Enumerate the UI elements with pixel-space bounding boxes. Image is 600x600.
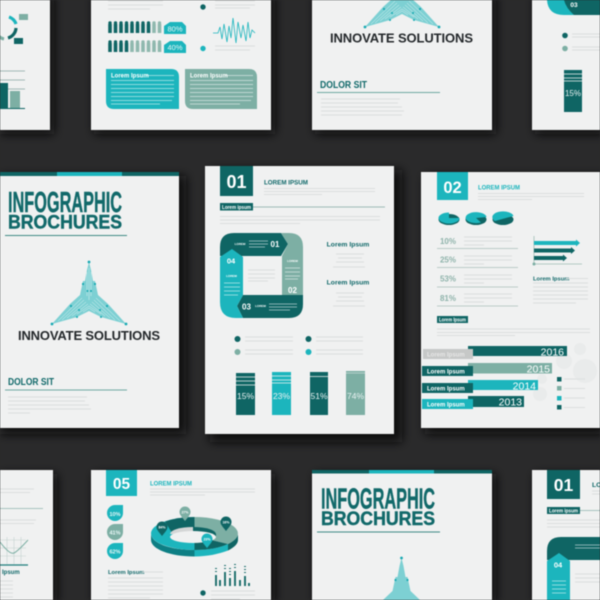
subheading: DOLOR SIT bbox=[320, 79, 367, 91]
text block bbox=[108, 570, 163, 598]
people row 80 percent bbox=[108, 21, 161, 33]
number box 05 bbox=[106, 470, 137, 496]
segment 01: 01 bbox=[271, 240, 280, 249]
text block: Lorem Ipsum two: Lorem Ipsum bbox=[327, 280, 369, 286]
line chart bbox=[0, 537, 28, 565]
panel: main cover page bbox=[0, 172, 179, 428]
timeline bar 2015: 2015 bbox=[527, 364, 550, 376]
number box 01 bbox=[220, 166, 253, 196]
title: INFOGRAPHIC bbox=[321, 484, 435, 516]
panel: bottom-right partial page bbox=[532, 470, 600, 600]
badge 80 percent bbox=[164, 22, 186, 34]
section label: Lorem ipsum bbox=[549, 508, 578, 514]
timeline bar 2016 bbox=[423, 346, 567, 359]
timeline bar 2016: Lorem Ipsum bbox=[427, 352, 465, 358]
segment 02 bbox=[281, 233, 303, 302]
badge 40 percent: 40% bbox=[167, 43, 183, 52]
number box 05: 05 bbox=[113, 476, 130, 493]
number box 02 bbox=[437, 172, 468, 200]
teardrop 62 percent: 62% bbox=[109, 550, 121, 556]
teardrop 41 percent bbox=[107, 524, 123, 540]
pin 16 percent: 16% bbox=[222, 520, 230, 524]
timeline bar 2015 bbox=[422, 363, 552, 376]
timeline bar 2013: 2013 bbox=[499, 396, 522, 408]
badge 80 percent: 80% bbox=[167, 24, 183, 34]
panel: page 05 bbox=[91, 470, 271, 600]
teardrop 10 percent bbox=[107, 505, 123, 521]
label: Ipsum bbox=[2, 570, 20, 576]
bar 74 percent: 74% bbox=[347, 391, 364, 401]
subtitle: BROCHURES bbox=[321, 508, 435, 530]
icon: circuit logo bbox=[51, 261, 127, 325]
donut labels bbox=[14, 14, 28, 44]
subtitle: BROCHURES bbox=[8, 212, 122, 234]
badge 40 percent bbox=[164, 41, 186, 53]
timeline bar 2015: Lorem Ipsum bbox=[427, 370, 465, 376]
cycle diagram bbox=[220, 233, 303, 318]
timeline bar 2013 bbox=[422, 396, 524, 409]
pin 23 percent bbox=[202, 534, 212, 548]
pin 23 percent: 23% bbox=[203, 538, 211, 542]
segment 01 bbox=[220, 233, 288, 256]
pin 84 percent bbox=[156, 522, 168, 536]
stat rows: 10% bbox=[440, 237, 456, 246]
stat rows: 53% bbox=[440, 274, 456, 284]
pin 16 percent bbox=[220, 516, 232, 531]
pin 84 percent: 84% bbox=[158, 526, 166, 530]
bar 15 percent bbox=[236, 373, 255, 415]
callout: cyan box bbox=[106, 69, 179, 109]
callout: sage box bbox=[185, 69, 257, 109]
number box 01: 01 bbox=[226, 172, 247, 192]
section label: Lorem ipsum bbox=[222, 205, 251, 211]
top colour strip bbox=[0, 172, 179, 176]
icon: circuit logo spire bbox=[383, 557, 420, 600]
pin 27 percent: 27% bbox=[181, 510, 189, 514]
segment 03: 03 bbox=[242, 302, 251, 312]
small legend bbox=[557, 377, 585, 410]
arrow bar chart bbox=[532, 236, 582, 266]
panel: top-left partial page bbox=[0, 0, 50, 130]
callout: sage box: Lorem Ipsum bbox=[190, 74, 228, 80]
segment 04: 04 bbox=[227, 256, 236, 266]
bar 51 percent: 51% bbox=[310, 391, 328, 401]
text block: Lorem Ipsum two bbox=[327, 280, 369, 306]
timeline bar 2014 bbox=[422, 380, 538, 393]
panel: page 02 bbox=[421, 172, 600, 428]
teardrop 41 percent: 41% bbox=[109, 530, 121, 536]
stat rows bbox=[437, 237, 518, 306]
logo wordmark: INNOVATE SOLUTIONS bbox=[18, 328, 160, 343]
stat rows: 25% bbox=[440, 256, 456, 264]
panel: top-right partial page bbox=[532, 0, 600, 130]
heading: LOREM IPSUM bbox=[150, 480, 192, 488]
teardrop 62 percent bbox=[107, 543, 123, 559]
bar 23 percent: 23% bbox=[273, 391, 290, 401]
icon: cyan dot bbox=[200, 46, 206, 51]
donut chart fragment bbox=[0, 17, 16, 39]
dotted bar chart bbox=[216, 562, 249, 586]
icon: dark dot bbox=[200, 4, 206, 10]
cycle diagram fragment: 03 bbox=[570, 2, 578, 9]
bar 74 percent bbox=[346, 371, 365, 415]
cycle diagram fragment: 04 bbox=[554, 560, 563, 570]
bar chart fragment bbox=[0, 71, 25, 108]
number box 02: 02 bbox=[443, 179, 462, 197]
logo wordmark: INNOVATE SOLUTIONS bbox=[330, 30, 473, 46]
segment 04: LOREM bbox=[226, 274, 237, 278]
panel: top cover page bbox=[312, 0, 492, 130]
bar 15 percent: 15% bbox=[237, 391, 254, 401]
panel: top people page bbox=[91, 0, 271, 130]
segment 04 bbox=[220, 249, 243, 318]
timeline bar 2013: Lorem Ipsum bbox=[427, 402, 465, 408]
top colour strip bbox=[312, 470, 492, 474]
timeline bar 2014: 2014 bbox=[513, 380, 536, 392]
teardrop 10 percent: 10% bbox=[109, 512, 121, 518]
segment 03 bbox=[237, 295, 303, 318]
text block: Lorem Ipsum: Lorem Ipsum bbox=[533, 276, 569, 282]
heading: LOREM IPSUM bbox=[478, 184, 520, 192]
pin 27 percent bbox=[180, 506, 190, 521]
panel: bottom cover page bbox=[312, 470, 492, 600]
text block: Lorem Ipsum one bbox=[327, 242, 369, 267]
timeline bar 2016: 2016 bbox=[541, 346, 564, 358]
text block: Lorem Ipsum bbox=[533, 276, 588, 303]
segment 03: LOREM bbox=[255, 304, 266, 308]
subheading: DOLOR SIT bbox=[8, 376, 54, 388]
pie icons bbox=[438, 211, 514, 225]
panel: page 01 bbox=[205, 166, 394, 434]
segment 02: 02 bbox=[288, 286, 297, 295]
segment 01: LOREM bbox=[235, 242, 246, 246]
wave chart bbox=[213, 18, 255, 43]
text block: Lorem Ipsum bbox=[108, 570, 144, 576]
heading: LOREM IPSUM bbox=[264, 180, 308, 186]
bar 23 percent bbox=[272, 372, 291, 415]
title: INFOGRAPHIC bbox=[8, 187, 122, 219]
section label bbox=[220, 203, 253, 211]
icon: circuit logo bbox=[364, 0, 440, 28]
bullets bbox=[562, 33, 600, 51]
timeline bar 2014: Lorem Ipsum bbox=[427, 386, 465, 392]
panel: bottom-left partial page bbox=[0, 470, 53, 600]
stat rows: 81% bbox=[440, 294, 456, 303]
number box 01: 01 bbox=[554, 475, 573, 495]
bar 51 percent bbox=[310, 372, 328, 415]
gear decorations bbox=[533, 343, 597, 401]
3D ring chart bbox=[151, 517, 238, 556]
icon: dark dot bbox=[200, 590, 206, 596]
people row 40 percent bbox=[108, 40, 161, 52]
text block: Lorem Ipsum one: Lorem Ipsum bbox=[327, 242, 369, 248]
bar 15 percent: 15% bbox=[565, 89, 581, 98]
section label: Lorem Ipsum bbox=[439, 318, 466, 324]
segment 02: LOREM bbox=[287, 259, 298, 263]
bullet legend bbox=[234, 336, 363, 355]
callout: cyan box: Lorem Ipsum bbox=[111, 74, 149, 80]
